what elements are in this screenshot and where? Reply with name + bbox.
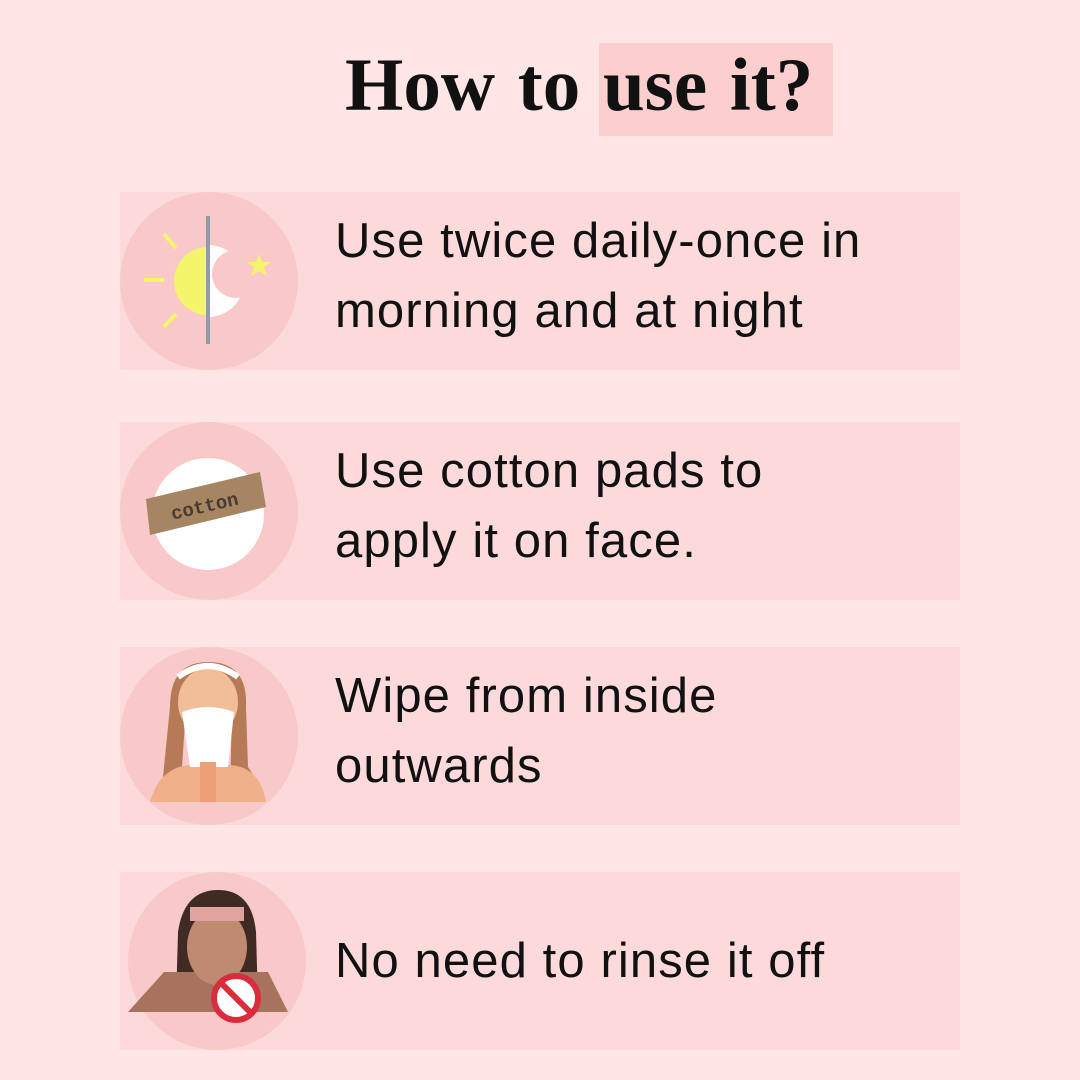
panel: wipe <box>120 647 960 825</box>
panel: cotton pads <box>120 422 960 600</box>
text: Use twice daily-once in <box>335 214 861 268</box>
icon: face with no sign <box>128 872 306 1050</box>
title highlight <box>599 43 833 136</box>
title <box>345 43 833 136</box>
icon: cotton pad: cotton <box>169 489 241 526</box>
panel: no rinse <box>120 872 960 1050</box>
text: apply it on face. <box>335 514 697 568</box>
title text: How to use it? <box>345 44 813 127</box>
text <box>335 214 861 338</box>
icon: woman wiping face <box>120 647 298 825</box>
icon: cotton pad <box>120 422 298 600</box>
text: Wipe from inside <box>335 669 718 723</box>
text <box>335 444 763 568</box>
text: outwards <box>335 739 543 793</box>
text: No need to rinse it off <box>335 934 825 988</box>
panel: twice daily <box>120 192 960 370</box>
text: morning and at night <box>335 284 804 338</box>
text <box>335 669 718 793</box>
icon: sun and moon <box>120 192 298 370</box>
text: Use cotton pads to <box>335 444 763 498</box>
